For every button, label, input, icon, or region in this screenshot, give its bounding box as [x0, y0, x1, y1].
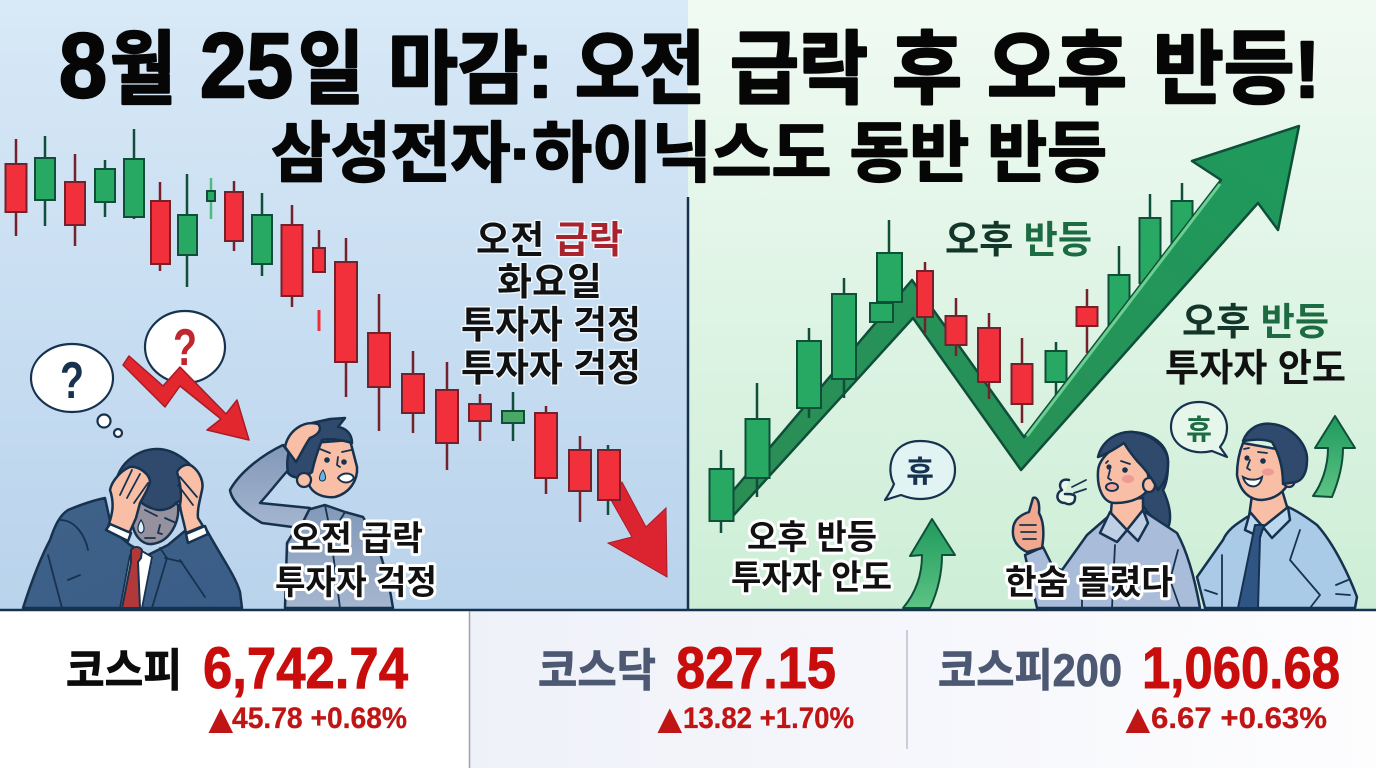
illustration: smiling man with tie	[1197, 424, 1357, 608]
title: main headline: 8	[59, 15, 107, 117]
label: afternoon rebound investor relief, overlay caption: 오후 반등	[747, 519, 877, 557]
index card: KOSPI: 45.78 +0.68%	[232, 702, 407, 735]
index card: KOSPI 200: ▲	[1117, 695, 1159, 742]
heading: morning plunge Tuesday investor worry: 화요일	[497, 262, 602, 304]
title: main headline: 오후	[987, 25, 1127, 114]
divider line between morning and afternoon panels	[687, 197, 689, 609]
arrow: small green up arrow right	[1313, 416, 1355, 497]
icon: speech bubble sigh left	[885, 441, 955, 500]
index card: KOSPI: 코스피	[66, 645, 182, 696]
title: main headline: 후	[892, 25, 962, 114]
title: main headline: 오전	[575, 25, 705, 114]
panel: afternoon rebound background	[688, 0, 1376, 610]
label: morning plunge investor worry, overlay caption: 투자자 걱정	[275, 564, 437, 602]
index card: KOSDAQ: 13.82 +1.70%	[683, 702, 854, 735]
candlestick chart: candles behind rebound arrow	[1046, 183, 1192, 395]
heading: afternoon rebound investor relief	[1165, 302, 1346, 390]
candlestick chart: candles over rebound arrow	[710, 220, 1032, 533]
icon: speech bubble sigh right	[1171, 402, 1227, 457]
icon: thought bubbles with question marks	[31, 311, 225, 437]
icon: thought bubbles with question marks: ?	[173, 319, 197, 377]
index card: KOSPI 200: 코스피200	[938, 645, 1122, 696]
index card: KOSPI: 6,742.74	[203, 636, 408, 701]
title: main headline	[59, 15, 1320, 117]
divider lines in index strip	[470, 611, 907, 768]
index card: KOSDAQ: ▲	[649, 695, 691, 742]
heading: morning plunge Tuesday investor worry: 투자자 걱정	[461, 348, 641, 390]
index card: KOSPI 200: 1,060.68	[1142, 636, 1340, 701]
heading: morning plunge Tuesday investor worry: 투자자 걱정	[461, 305, 641, 347]
icon: thought bubbles with question marks: ?	[60, 352, 84, 410]
index card: KOSDAQ: 827.15	[676, 636, 836, 701]
candle: last red candle over plunge arrow	[598, 450, 620, 500]
heading: afternoon rebound investor relief: 오후 반등	[1182, 302, 1329, 344]
index card: KOSPI	[66, 636, 408, 742]
heading: morning plunge Tuesday investor worry: 오전 급락	[476, 220, 623, 262]
illustration: worried investor looking up	[230, 418, 393, 608]
candlestick chart: falling morning market	[6, 129, 608, 522]
illustration: relieved woman with thumbs up	[1013, 432, 1200, 608]
arrow: zigzag red down arrow	[123, 356, 249, 440]
panel: morning plunge background	[0, 0, 688, 610]
subtitle: Samsung and Hynix also rebounded: 삼성전자·하이닉스도 동반 반등	[271, 116, 1107, 190]
heading: afternoon rebound investor relief: 투자자 안도	[1165, 348, 1346, 390]
index card: KOSPI: ▲	[200, 695, 242, 742]
icon: speech bubble sigh right: 휴	[1186, 414, 1212, 445]
index card: KOSPI 200: 6.67 +0.63%	[1151, 702, 1327, 735]
label: afternoon rebound investor relief, overlay caption	[731, 519, 892, 597]
title: main headline: 급락	[730, 25, 868, 114]
title: main headline: 25	[200, 15, 293, 117]
index card: KOSDAQ: 코스닥	[538, 645, 656, 696]
heading: morning plunge Tuesday investor worry	[461, 220, 641, 390]
index card: KOSPI 200	[938, 636, 1340, 742]
title: main headline: 일	[298, 25, 364, 114]
illustration: slumped investor holding head	[23, 449, 242, 608]
arrow: small green up arrow center	[903, 519, 955, 608]
icon: speech bubble sigh left: 휴	[906, 456, 934, 489]
panel: index strip background	[0, 610, 1376, 768]
title: main headline: 월	[110, 25, 176, 114]
label: morning plunge investor worry, overlay caption	[275, 520, 437, 602]
heading: afternoon rebound: 오후 반등	[945, 220, 1092, 262]
bottom border line of illustration panels	[0, 609, 1376, 611]
title: main headline: 반등!	[1153, 25, 1320, 114]
label: afternoon rebound investor relief, overlay caption: 투자자 안도	[731, 559, 892, 597]
title: main headline: 마감:	[388, 25, 553, 114]
label: breath of relief, overlay caption: 한숨 돌렸다	[1005, 564, 1173, 602]
arrow: large red plunge arrow	[608, 482, 667, 577]
index card: KOSDAQ	[538, 636, 854, 742]
label: morning plunge investor worry, overlay caption: 오전 급락	[290, 520, 423, 558]
arrow: large green W-shaped rebound arrow	[732, 126, 1299, 517]
